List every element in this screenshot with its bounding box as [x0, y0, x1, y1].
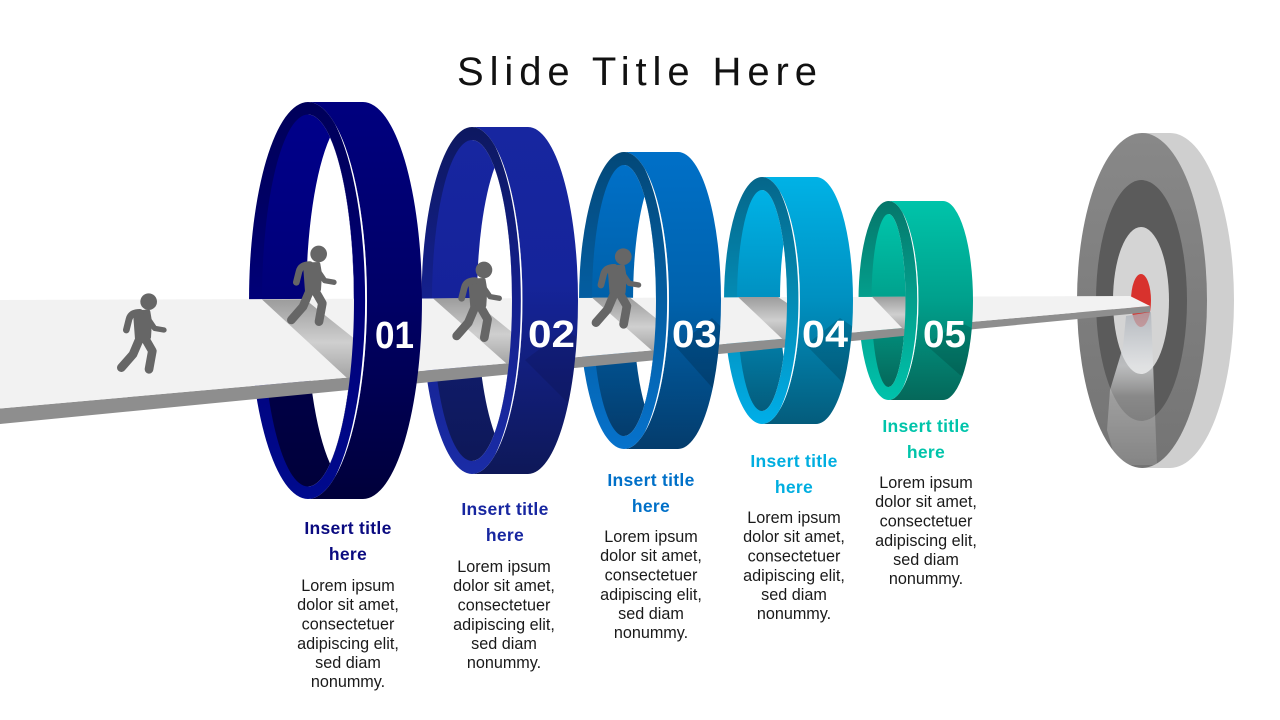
- text block 5: dolor sit amet,: [875, 493, 977, 511]
- text block 2: [453, 499, 555, 672]
- text block 4: adipiscing elit,: [743, 567, 845, 585]
- text block 5: [875, 416, 977, 588]
- text block 2: Lorem ipsum: [457, 558, 551, 576]
- ring 2 front: band, rim and number: [472, 127, 578, 474]
- text block 4: dolor sit amet,: [743, 528, 845, 546]
- ring 1 rear: left rim and inner wall: [249, 102, 354, 499]
- text block 1: [297, 518, 399, 691]
- ring 2 rear: left rim and inner wall: [422, 127, 512, 474]
- text block 1: adipiscing elit,: [297, 635, 399, 653]
- text block 1: Insert title: [304, 518, 392, 538]
- ring 5 rear: left rim and inner wall: [859, 201, 906, 400]
- text block 3: adipiscing elit,: [600, 586, 702, 604]
- text block 3: nonummy.: [614, 624, 688, 642]
- text block 5: here: [907, 442, 945, 462]
- text block 4: Lorem ipsum: [747, 509, 841, 527]
- text block 3: dolor sit amet,: [600, 547, 702, 565]
- text block 2: sed diam: [471, 635, 537, 653]
- text block 1: here: [329, 544, 367, 564]
- text block 1: nonummy.: [311, 673, 385, 691]
- ring 5 front: band, rim and number: 05: [923, 314, 966, 356]
- text block 1: Lorem ipsum: [301, 577, 395, 595]
- text block 4: Insert title: [750, 451, 838, 471]
- text block 1: sed diam: [315, 654, 381, 672]
- road: path leading to the target: [0, 296, 1150, 424]
- text block 4: consectetuer: [748, 548, 841, 566]
- text block 5: Lorem ipsum: [879, 474, 973, 492]
- icon: walker in ring 3: [596, 248, 639, 324]
- text block 2: adipiscing elit,: [453, 616, 555, 634]
- text block 4: [743, 451, 845, 623]
- text block 5: consectetuer: [880, 512, 973, 530]
- text block 2: Insert title: [461, 499, 549, 519]
- text block 5: adipiscing elit,: [875, 532, 977, 550]
- ring 2 front: band, rim and number: 02: [528, 314, 575, 356]
- ring 4 front: band, rim and number: [762, 177, 853, 424]
- text block 4: nonummy.: [757, 605, 831, 623]
- text block 3: sed diam: [618, 605, 684, 623]
- text block 3: here: [632, 496, 670, 516]
- ring 3 front: band, rim and number: [624, 152, 721, 449]
- text block 2: consectetuer: [458, 596, 551, 614]
- ring 3 rear: left rim and inner wall: [579, 152, 656, 449]
- text block 5: Insert title: [882, 416, 970, 436]
- icon: walker in ring 1: [291, 246, 334, 322]
- text block 5: nonummy.: [889, 570, 963, 588]
- target: bullseye: [1077, 133, 1234, 468]
- title: Slide Title Here: [457, 50, 817, 94]
- text block 3: consectetuer: [605, 566, 698, 584]
- ring 4 front: band, rim and number: 04: [802, 314, 848, 356]
- ring 5 front: band, rim and number: [888, 201, 973, 400]
- icon: walker in ring 2: [457, 262, 499, 338]
- text block 3: [600, 470, 702, 642]
- ring 1 front: band, rim and number: [308, 102, 422, 499]
- text block 1: dolor sit amet,: [297, 596, 399, 614]
- text block 3: Insert title: [607, 470, 695, 490]
- text block 5: sed diam: [893, 551, 959, 569]
- icon: walker on the road: [121, 293, 164, 369]
- text block 4: sed diam: [761, 586, 827, 604]
- text block 2: here: [486, 525, 524, 545]
- ring 4 rear: left rim and inner wall: [724, 177, 787, 424]
- ring 3 front: band, rim and number: 03: [672, 314, 717, 356]
- text block 2: dolor sit amet,: [453, 577, 555, 595]
- text block 1: consectetuer: [302, 616, 395, 634]
- text block 2: nonummy.: [467, 654, 541, 672]
- text block 4: here: [775, 477, 813, 497]
- ring 1 front: band, rim and number: 01: [375, 315, 414, 357]
- text block 3: Lorem ipsum: [604, 528, 698, 546]
